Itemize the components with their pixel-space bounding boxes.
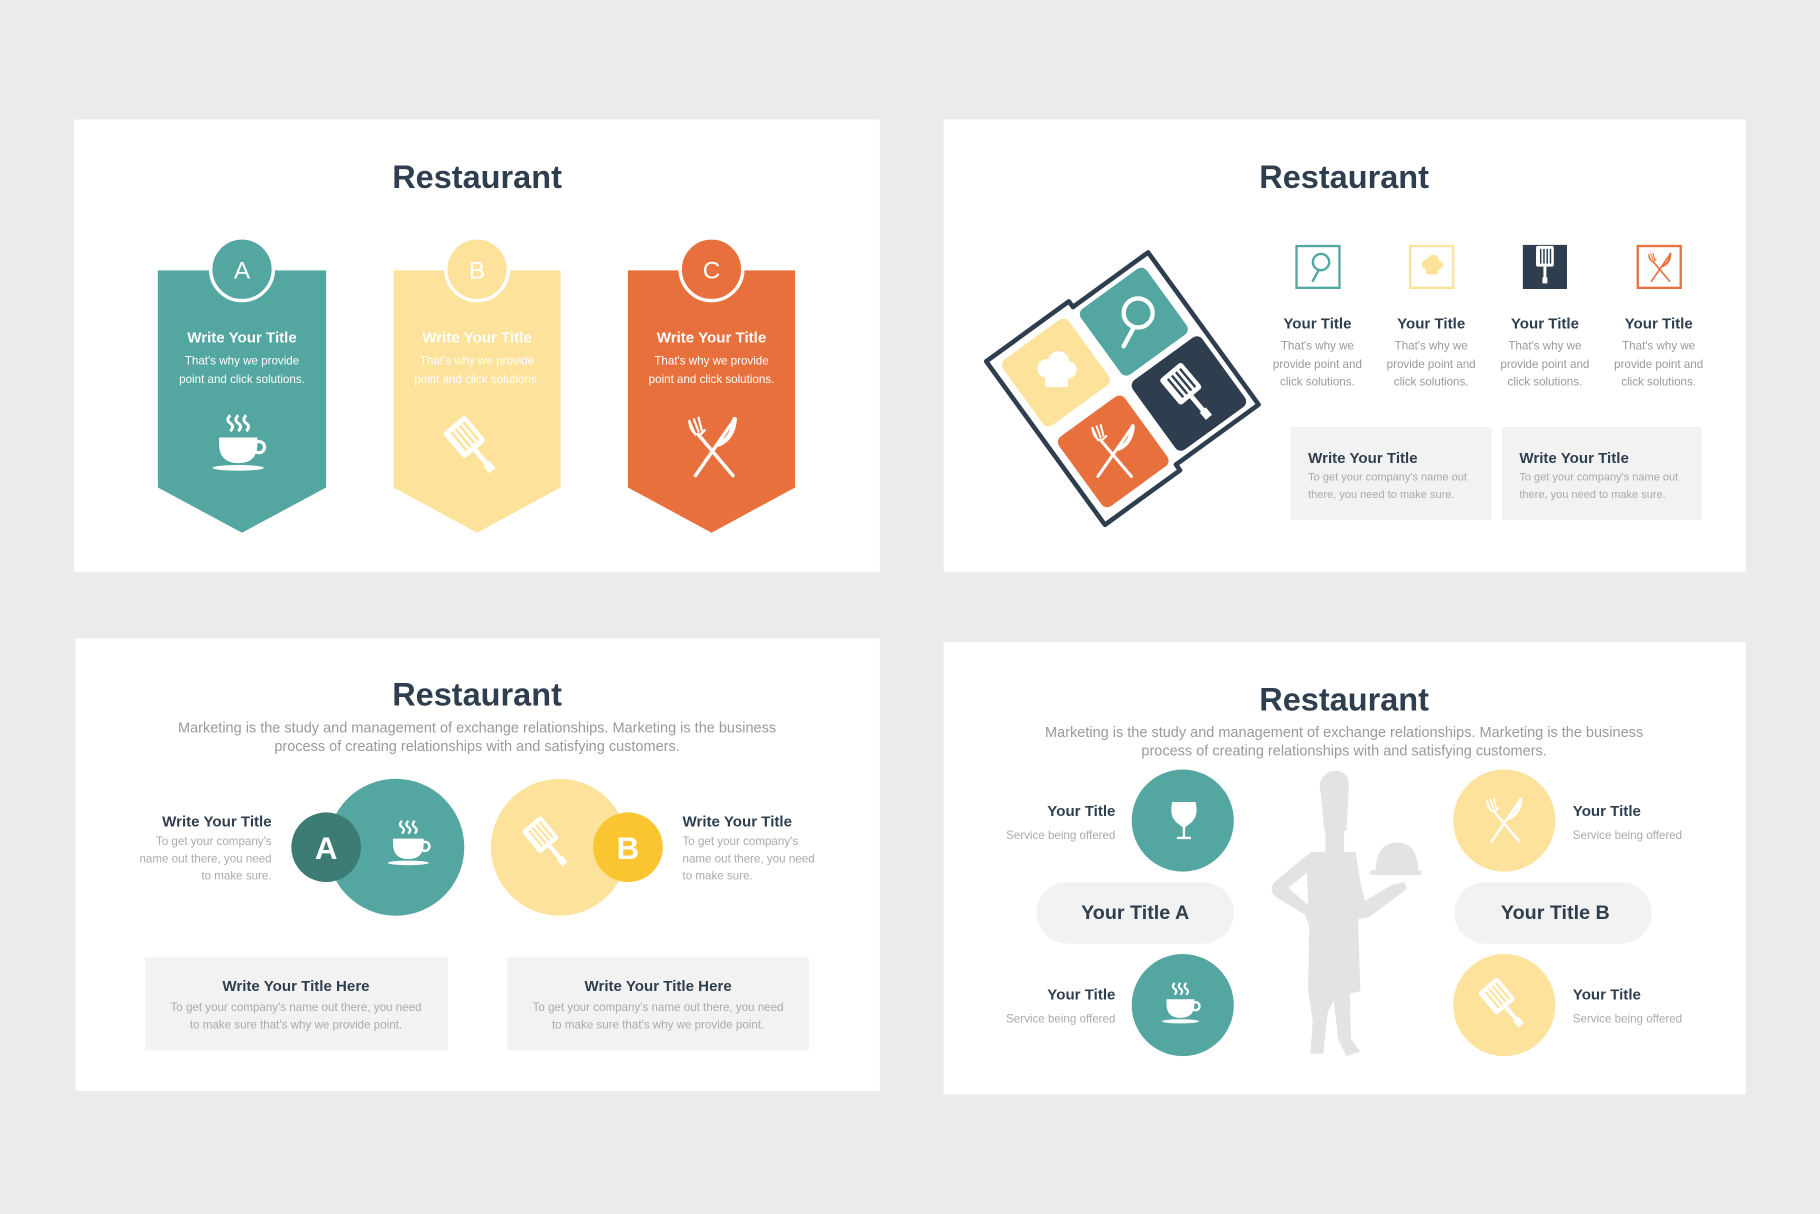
right text: name out there, you need xyxy=(682,852,815,865)
labels: Service being offered xyxy=(1006,1012,1115,1025)
left text: to make sure. xyxy=(201,870,272,883)
title: panel 4: Restaurant xyxy=(1259,681,1429,717)
text columns: click solutions. xyxy=(1508,375,1582,388)
panel: chef xyxy=(944,642,1746,1094)
labels: Service being offered xyxy=(1006,829,1115,842)
circle A xyxy=(291,779,464,916)
labels: Your Title xyxy=(1047,986,1115,1003)
panel: tiles xyxy=(944,120,1746,572)
text columns: That's why we xyxy=(1508,339,1581,352)
pills: Your Title B xyxy=(1501,902,1610,924)
banner B: That's why we provide xyxy=(420,354,534,367)
text columns: Your Title xyxy=(1511,315,1579,332)
left text xyxy=(139,813,272,883)
gray boxes: Write Your Title xyxy=(1519,450,1629,467)
bottom boxes: to make sure that's why we provide point. xyxy=(190,1018,402,1031)
text columns: click solutions. xyxy=(1280,375,1355,388)
pills: Your Title A xyxy=(1081,902,1189,924)
right text xyxy=(682,813,815,883)
bottom boxes: Write Your Title Here xyxy=(222,978,370,995)
text columns: click solutions. xyxy=(1621,375,1696,388)
right text: to make sure. xyxy=(682,870,753,883)
panel: banners xyxy=(74,120,880,572)
labels: Your Title xyxy=(1573,803,1641,820)
banner A: A xyxy=(234,258,251,285)
banner B xyxy=(393,238,561,533)
text columns: That's why we xyxy=(1281,339,1354,352)
circle items left xyxy=(1132,769,1234,1056)
title: panel 2: Restaurant xyxy=(1259,159,1429,195)
title: panel 1: Restaurant xyxy=(392,159,562,195)
right text: Write Your Title xyxy=(682,813,792,830)
left text: name out there, you need xyxy=(139,852,272,865)
left text: To get your company's xyxy=(156,835,272,848)
text columns: provide point and xyxy=(1387,358,1476,371)
banner A xyxy=(158,238,326,533)
labels: Your Title xyxy=(1047,803,1115,820)
labels: Service being offered xyxy=(1573,1012,1682,1025)
title: panel 3: Restaurant xyxy=(392,677,562,713)
gray boxes: To get your company's name out xyxy=(1308,471,1467,483)
circle A: A xyxy=(315,831,337,866)
subtitle: process of creating relationships with and satisfying customers. xyxy=(274,739,680,755)
gray boxes: Write Your Title xyxy=(1308,450,1418,467)
banner A: point and click solutions. xyxy=(179,373,305,386)
bottom boxes: Write Your Title Here xyxy=(585,978,732,995)
circle B xyxy=(491,779,663,916)
text columns: Your Title xyxy=(1625,315,1693,332)
icon boxes row xyxy=(1297,237,1681,292)
banner C: point and click solutions. xyxy=(649,373,774,386)
bottom boxes: To get your company's name out there, you need xyxy=(170,1001,421,1014)
banner C: C xyxy=(703,258,720,285)
text columns: Your Title xyxy=(1283,315,1351,332)
pills xyxy=(1037,882,1652,944)
text columns: provide point and xyxy=(1500,358,1589,371)
text columns: Your Title xyxy=(1397,315,1465,332)
banner B: Write Your Title xyxy=(422,329,532,346)
labels xyxy=(1006,803,1682,1025)
subtitle xyxy=(1045,725,1643,760)
bottom boxes: to make sure that's why we provide point. xyxy=(552,1018,764,1031)
banner B: B xyxy=(469,258,485,285)
text columns: That's why we xyxy=(1395,339,1468,352)
banner C: That's why we provide xyxy=(654,354,769,367)
chef silhouette xyxy=(1272,771,1422,1056)
gray boxes xyxy=(1291,427,1702,520)
text columns: click solutions. xyxy=(1394,375,1469,388)
circle B: B xyxy=(617,831,639,866)
banner A: Write Your Title xyxy=(187,329,297,346)
tilted tile graphic xyxy=(986,247,1263,525)
banner A: That's why we provide xyxy=(185,354,299,367)
text columns: That's why we xyxy=(1622,339,1695,352)
labels: Service being offered xyxy=(1573,829,1682,842)
bottom boxes xyxy=(145,958,809,1050)
subtitle: Marketing is the study and management of exchange relationships. Marketing is the business xyxy=(178,720,776,736)
text columns xyxy=(1273,315,1703,388)
text columns: provide point and xyxy=(1273,358,1362,371)
banner C xyxy=(628,238,795,533)
right text: To get your company's xyxy=(682,835,798,848)
bottom boxes: To get your company's name out there, you need xyxy=(533,1001,784,1014)
left text: Write Your Title xyxy=(162,813,272,830)
text columns: provide point and xyxy=(1614,358,1703,371)
labels: Your Title xyxy=(1573,986,1641,1003)
panel: circles A B xyxy=(75,638,880,1091)
subtitle: Marketing is the study and management of exchange relationships. Marketing is the business xyxy=(1045,725,1643,741)
subtitle xyxy=(178,720,776,755)
circle items right xyxy=(1453,769,1555,1056)
gray boxes: there, you need to make sure. xyxy=(1519,489,1666,501)
banner B: point and click solutions. xyxy=(414,373,540,386)
gray boxes: To get your company's name out xyxy=(1519,471,1678,483)
banner C: Write Your Title xyxy=(657,329,766,346)
subtitle: process of creating relationships with and satisfying customers. xyxy=(1141,744,1547,760)
gray boxes: there, you need to make sure. xyxy=(1308,489,1454,501)
